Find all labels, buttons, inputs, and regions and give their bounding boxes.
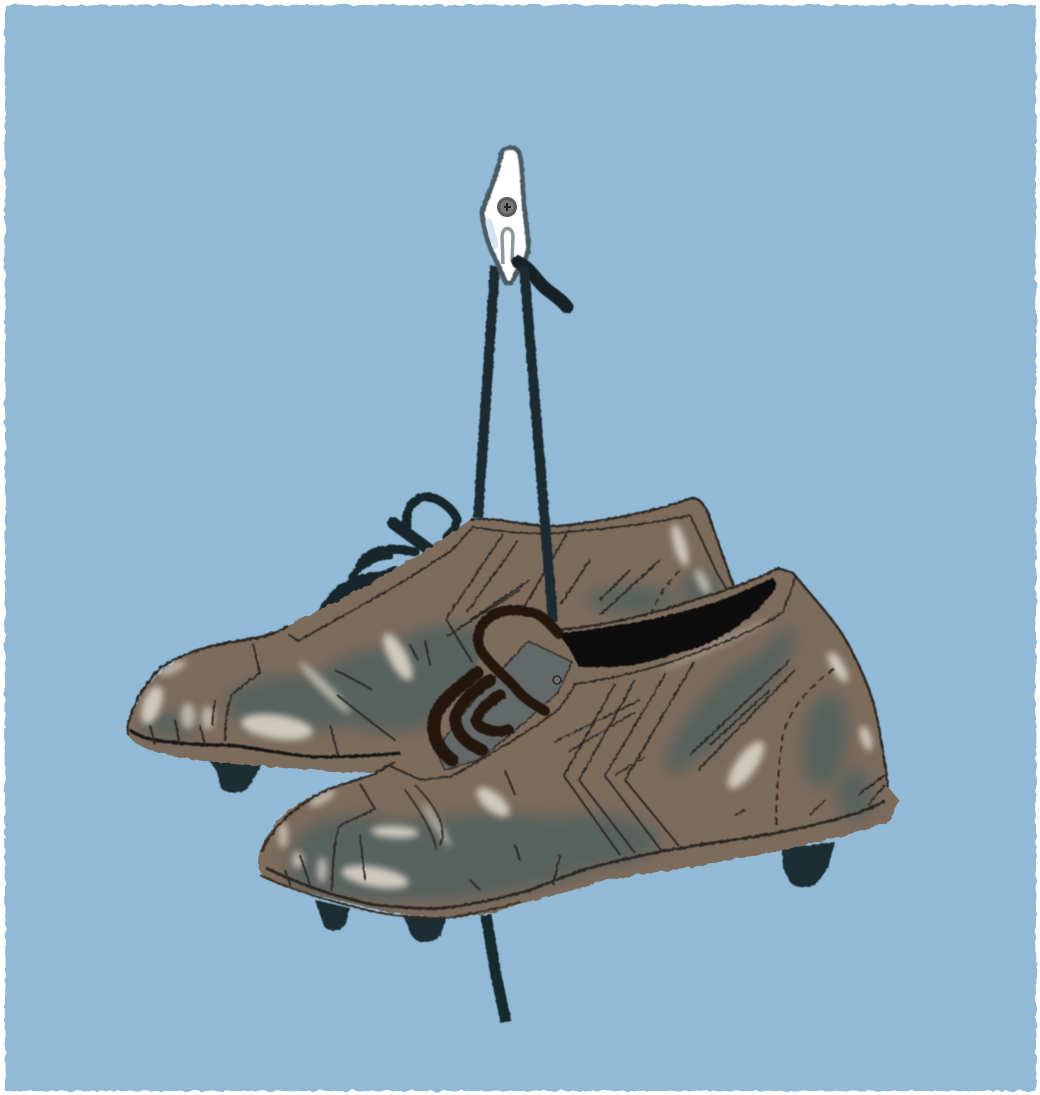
front boot laces bbox=[434, 610, 559, 760]
back boot outline and stitching bbox=[128, 498, 735, 757]
front boot tongue bbox=[436, 641, 572, 770]
back boot shading bbox=[137, 522, 720, 744]
front boot opening bbox=[559, 578, 777, 667]
icon: wall hook bbox=[482, 148, 528, 283]
cleats of front boot bbox=[315, 842, 835, 943]
front boot shading bbox=[278, 616, 875, 914]
lace knot on hook bbox=[518, 262, 567, 307]
panel: back boot bbox=[128, 498, 735, 773]
cleats of back boot bbox=[207, 757, 262, 792]
panel: front boot bbox=[258, 568, 900, 918]
front boot outline and stitching bbox=[260, 568, 888, 918]
lace end below boots bbox=[486, 915, 506, 1022]
back boot laces bbox=[319, 497, 457, 619]
back boot leather bbox=[128, 498, 735, 773]
back boot hanging lace, left strand bbox=[478, 266, 495, 518]
front boot leather bbox=[258, 568, 900, 917]
front boot grommet bbox=[553, 676, 561, 684]
back boot hanging lace, right strand bbox=[524, 266, 553, 622]
